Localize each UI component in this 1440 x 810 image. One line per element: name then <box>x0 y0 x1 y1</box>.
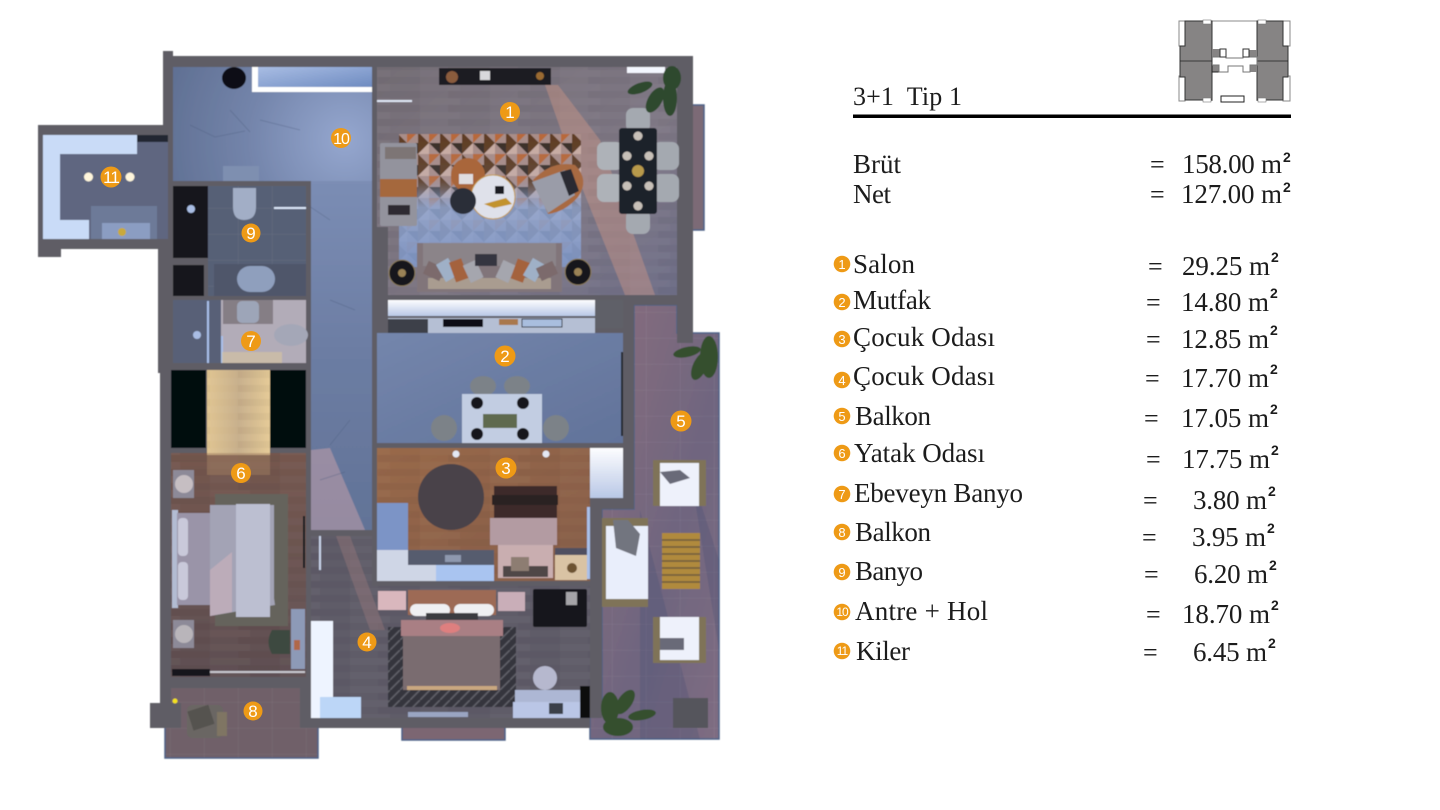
row 8 Balkon: Balkon <box>855 517 932 547</box>
row 6 Yatak Odasi: 6 <box>838 446 846 461</box>
row 4 Cocuk Odasi <box>834 361 1278 393</box>
row 7 Ebeveyn Banyo <box>834 478 1276 515</box>
row 11 Kiler <box>834 635 1276 667</box>
side tables <box>389 260 415 286</box>
marker 4: 4 <box>362 633 372 652</box>
small balcony beside salon <box>690 105 704 230</box>
row 7 Ebeveyn Banyo: = <box>1143 486 1158 515</box>
nightstands <box>378 591 406 610</box>
row 8 Balkon: 3.95 m <box>1192 522 1266 552</box>
rug <box>388 627 516 707</box>
slatted table <box>662 533 700 589</box>
row 3 Cocuk Odasi: 12.85 m <box>1181 324 1269 354</box>
marker 3: 3 <box>501 459 511 478</box>
marker 6 <box>231 463 251 483</box>
sofa <box>602 518 648 607</box>
marker 4 <box>358 632 376 652</box>
net area: 2 <box>1283 179 1291 195</box>
gross area <box>853 149 1291 179</box>
marker 1 <box>500 102 520 122</box>
row 1 Salon: = <box>1148 252 1163 281</box>
title rule <box>853 114 1291 118</box>
marker 5: 5 <box>676 412 686 431</box>
black pouf <box>222 67 246 89</box>
row 1 Salon <box>834 249 1279 281</box>
row 4 Cocuk Odasi: = <box>1145 364 1160 393</box>
gross area: = <box>1150 150 1165 179</box>
geometric rug <box>399 134 581 267</box>
cushions <box>423 254 558 283</box>
row 9 Banyo: Banyo <box>855 556 923 586</box>
row 6 Yatak Odasi <box>834 438 1279 474</box>
nightstands <box>173 470 194 498</box>
row 6 Yatak Odasi: 17.75 m <box>1182 444 1270 474</box>
row 3 Cocuk Odasi: 3 <box>838 332 846 347</box>
row 3 Cocuk Odasi: = <box>1146 325 1161 354</box>
row 7 Ebeveyn Banyo: Ebeveyn Banyo <box>854 478 1023 508</box>
row 3 Cocuk Odasi: Çocuk Odası <box>853 322 995 352</box>
marker 11 <box>100 166 122 188</box>
row 5 Balkon <box>834 401 1278 433</box>
room 1: living room <box>375 66 681 300</box>
row 11 Kiler: Kiler <box>856 636 910 666</box>
row 2 Mutfak: Mutfak <box>853 285 932 315</box>
marker 2: 2 <box>500 347 510 366</box>
row 4 Cocuk Odasi: 2 <box>1270 361 1278 377</box>
gross area: 158.00 m <box>1182 149 1282 179</box>
row 4 Cocuk Odasi: 4 <box>838 373 846 388</box>
row 6 Yatak Odasi: 2 <box>1271 442 1279 458</box>
desk <box>533 666 557 690</box>
gross area: Brüt <box>853 149 901 179</box>
row 1 Salon: Salon <box>853 249 916 279</box>
row 9 Banyo: 6.20 m <box>1194 559 1268 589</box>
row 5 Balkon: 17.05 m <box>1181 403 1269 433</box>
row 2 Mutfak: 2 <box>1270 285 1278 301</box>
left sofa <box>380 143 417 226</box>
row 1 Salon: 29.25 m <box>1182 251 1270 281</box>
marker 10 <box>331 128 351 148</box>
row 8 Balkon <box>834 517 1275 552</box>
row 5 Balkon: 2 <box>1270 401 1278 417</box>
marker 3 <box>496 458 516 478</box>
row 8 Balkon: 8 <box>838 525 846 540</box>
console <box>291 609 305 669</box>
row 11 Kiler: 2 <box>1268 635 1276 651</box>
row 2 Mutfak: 2 <box>838 295 846 310</box>
row 5 Balkon: 5 <box>838 409 846 424</box>
marker 5 <box>670 410 692 432</box>
marker 9: 9 <box>246 224 256 243</box>
row 9 Banyo: 2 <box>1269 557 1277 573</box>
armchair <box>268 630 290 654</box>
row 10 Antre + Hol <box>834 596 1279 629</box>
balcony 5 floor <box>590 305 719 739</box>
wash basin <box>223 166 259 181</box>
marker 6: 6 <box>236 464 246 483</box>
row 7 Ebeveyn Banyo: 3.80 m <box>1193 485 1267 515</box>
row 10 Antre + Hol: 10 <box>836 605 849 619</box>
row 2 Mutfak <box>834 285 1278 317</box>
room 4: children's room <box>311 536 590 718</box>
room 3: children's room <box>377 448 623 581</box>
net area: 127.00 m <box>1181 179 1282 209</box>
grey planter <box>673 698 708 728</box>
row 11 Kiler: 11 <box>837 644 849 658</box>
plant bottom <box>601 687 657 736</box>
key plan thumbnail <box>1179 20 1290 102</box>
net area <box>853 179 1291 209</box>
row 10 Antre + Hol: Antre + Hol <box>855 596 988 626</box>
coffee tables <box>451 158 485 192</box>
room 11: storeroom <box>43 135 168 239</box>
bathtub <box>237 266 275 292</box>
row 11 Kiler: = <box>1143 638 1158 667</box>
curtain <box>172 669 210 676</box>
armchair <box>533 164 583 214</box>
console <box>439 68 551 85</box>
plant top <box>672 336 718 383</box>
row 9 Banyo <box>834 556 1277 589</box>
rug <box>215 494 288 626</box>
net area: Net <box>853 179 891 209</box>
room 10: entrance and hall <box>173 67 372 530</box>
marker 7: 7 <box>246 332 256 351</box>
bed <box>408 590 496 615</box>
marker 9 <box>242 224 260 243</box>
marker 2 <box>494 346 516 366</box>
row 6 Yatak Odasi: = <box>1146 445 1161 474</box>
bed <box>494 486 557 518</box>
room 9: bathroom <box>173 186 306 296</box>
row 9 Banyo: 9 <box>838 565 846 580</box>
row 3 Cocuk Odasi: 2 <box>1270 322 1278 338</box>
structural walls <box>38 51 693 728</box>
small balcony under room 4 <box>402 725 505 740</box>
room 2: kitchen <box>377 300 623 443</box>
marker 8: 8 <box>248 702 258 721</box>
room 7: en-suite bathroom <box>173 300 308 363</box>
marker 10: 10 <box>333 131 350 148</box>
row 10 Antre + Hol: = <box>1146 600 1161 629</box>
row 7 Ebeveyn Banyo: 2 <box>1268 483 1276 499</box>
marker 1: 1 <box>505 103 515 122</box>
wardrobe <box>311 621 361 718</box>
bed <box>172 510 178 608</box>
row 4 Cocuk Odasi: Çocuk Odası <box>853 361 995 391</box>
room 8 furniture: armchair <box>172 698 227 738</box>
row 5 Balkon: = <box>1144 404 1159 433</box>
row 5 Balkon: Balkon <box>855 401 932 431</box>
row 1 Salon: 1 <box>838 257 846 272</box>
room 6: bedroom and walk-in closet <box>171 370 306 677</box>
row 6 Yatak Odasi: Yatak Odası <box>854 438 985 468</box>
row 9 Banyo: = <box>1144 560 1159 589</box>
marker 11: 11 <box>103 168 119 187</box>
row 8 Balkon: = <box>1142 523 1157 552</box>
mirror niche <box>252 67 372 92</box>
marker 7 <box>241 331 261 351</box>
row 3 Cocuk Odasi <box>834 322 1278 354</box>
balcony 5 furniture <box>601 336 718 736</box>
marker 8 <box>244 702 262 721</box>
row 2 Mutfak: = <box>1146 288 1161 317</box>
row 10 Antre + Hol: 18.70 m <box>1182 599 1270 629</box>
black armchair <box>533 589 587 627</box>
floor plan <box>38 51 719 758</box>
armchair bottom <box>653 617 706 663</box>
room area list <box>834 249 1279 667</box>
row 1 Salon: 2 <box>1271 249 1279 265</box>
net area: = <box>1150 180 1165 209</box>
toilet <box>233 188 256 220</box>
title: 3+1 Tip 1 <box>853 82 962 111</box>
row 10 Antre + Hol: 2 <box>1271 597 1279 613</box>
room number markers <box>100 102 692 721</box>
row 11 Kiler: 6.45 m <box>1193 637 1267 667</box>
row 4 Cocuk Odasi: 17.70 m <box>1181 363 1269 393</box>
plant <box>626 66 681 116</box>
dining group <box>431 376 569 443</box>
gross area: 2 <box>1283 149 1291 165</box>
armchair top <box>653 460 706 506</box>
main sofa <box>417 243 562 292</box>
balcony 8 floor <box>150 688 318 758</box>
dining set <box>597 108 679 234</box>
row 7 Ebeveyn Banyo: 7 <box>838 487 846 502</box>
row 8 Balkon: 2 <box>1267 520 1275 536</box>
row 2 Mutfak: 14.80 m <box>1181 287 1269 317</box>
